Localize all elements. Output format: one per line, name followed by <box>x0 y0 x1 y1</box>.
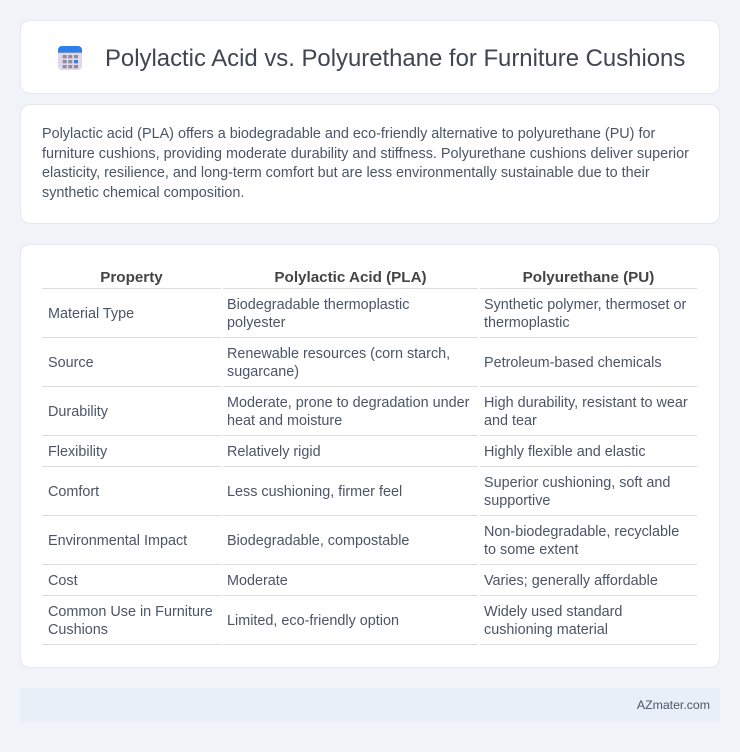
intro text: synthetic chemical composition. <box>42 184 244 200</box>
intro text: Polylactic acid (PLA) offers a biodegradable and eco-friendly alternative to polyurethane (PU) for <box>42 126 655 142</box>
column headers <box>100 269 654 286</box>
row: comfort: Less cushioning, firmer feel <box>227 484 402 500</box>
row: source: Petroleum-based chemicals <box>484 355 662 371</box>
row: source <box>48 346 662 380</box>
row: common use: Widely used standard <box>484 604 622 620</box>
row: flexibility: Flexibility <box>48 444 107 460</box>
row: environmental impact <box>48 524 679 558</box>
row: source: Renewable resources (corn starch, <box>227 346 450 362</box>
footer bar <box>20 688 720 722</box>
row: material type: Biodegradable thermoplastic <box>227 297 409 313</box>
row: material type <box>48 297 686 331</box>
intro panel <box>20 104 720 224</box>
row: environmental impact: Non-biodegradable, recyclable <box>484 524 679 540</box>
row: source: Source <box>48 355 94 371</box>
title: Polylactic Acid vs. Polyurethane for Furniture Cushions <box>105 45 685 72</box>
row: flexibility <box>48 444 646 460</box>
icon: calendar <box>58 46 82 70</box>
column headers: Polylactic Acid (PLA) <box>274 269 427 286</box>
row: comfort: supportive <box>484 493 550 509</box>
row: common use: Cushions <box>48 622 108 638</box>
intro text: elasticity, resilience, and long-term comfort but are less environmentally sustainable due to their <box>42 165 650 181</box>
table panel <box>20 244 720 668</box>
row: environmental impact: Biodegradable, compostable <box>227 533 409 549</box>
row: source: sugarcane) <box>227 364 299 380</box>
row: cost: Varies; generally affordable <box>484 573 658 589</box>
row: durability: High durability, resistant to wear <box>484 395 688 411</box>
row: material type: thermoplastic <box>484 315 570 331</box>
row: common use: Limited, eco-friendly option <box>227 613 399 629</box>
row: cost: Cost <box>48 573 78 589</box>
row: material type: Synthetic polymer, thermoset or <box>484 297 686 313</box>
intro text: furniture cushions, providing moderate durability and stiffness. Polyurethane cushions deliver superior <box>42 146 689 162</box>
row: durability: and tear <box>484 413 537 429</box>
row: durability: Moderate, prone to degradation under <box>227 395 469 411</box>
row: environmental impact: Environmental Impact <box>48 533 187 549</box>
row: material type: Material Type <box>48 306 134 322</box>
row: common use: Common Use in Furniture <box>48 604 213 620</box>
row: comfort <box>48 475 670 509</box>
row: comfort: Superior cushioning, soft and <box>484 475 670 491</box>
row: material type: polyester <box>227 315 285 331</box>
footer credit: AZmater.com <box>637 698 710 712</box>
column headers: Polyurethane (PU) <box>523 269 654 286</box>
row: comfort: Comfort <box>48 484 99 500</box>
row: durability <box>48 395 688 429</box>
row: common use: cushioning material <box>484 622 608 638</box>
row: cost: Moderate <box>227 573 288 589</box>
row: durability: heat and moisture <box>227 413 342 429</box>
row: environmental impact: to some extent <box>484 542 578 558</box>
row: flexibility: Relatively rigid <box>227 444 321 460</box>
intro text <box>42 126 689 200</box>
row: flexibility: Highly flexible and elastic <box>484 444 646 460</box>
row: durability: Durability <box>48 404 108 420</box>
row: common use <box>48 604 622 638</box>
header panel <box>20 20 720 94</box>
column headers: Property <box>100 269 163 286</box>
row: cost <box>48 573 658 589</box>
